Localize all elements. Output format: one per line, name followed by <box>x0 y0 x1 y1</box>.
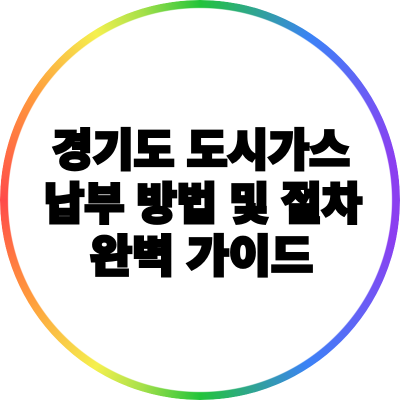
title line 1: 경기도 도시가스 <box>52 126 350 176</box>
title line 2: 납부 방법 및 절차 <box>44 180 362 229</box>
title line 3: 완벽 가이드 <box>90 232 313 282</box>
